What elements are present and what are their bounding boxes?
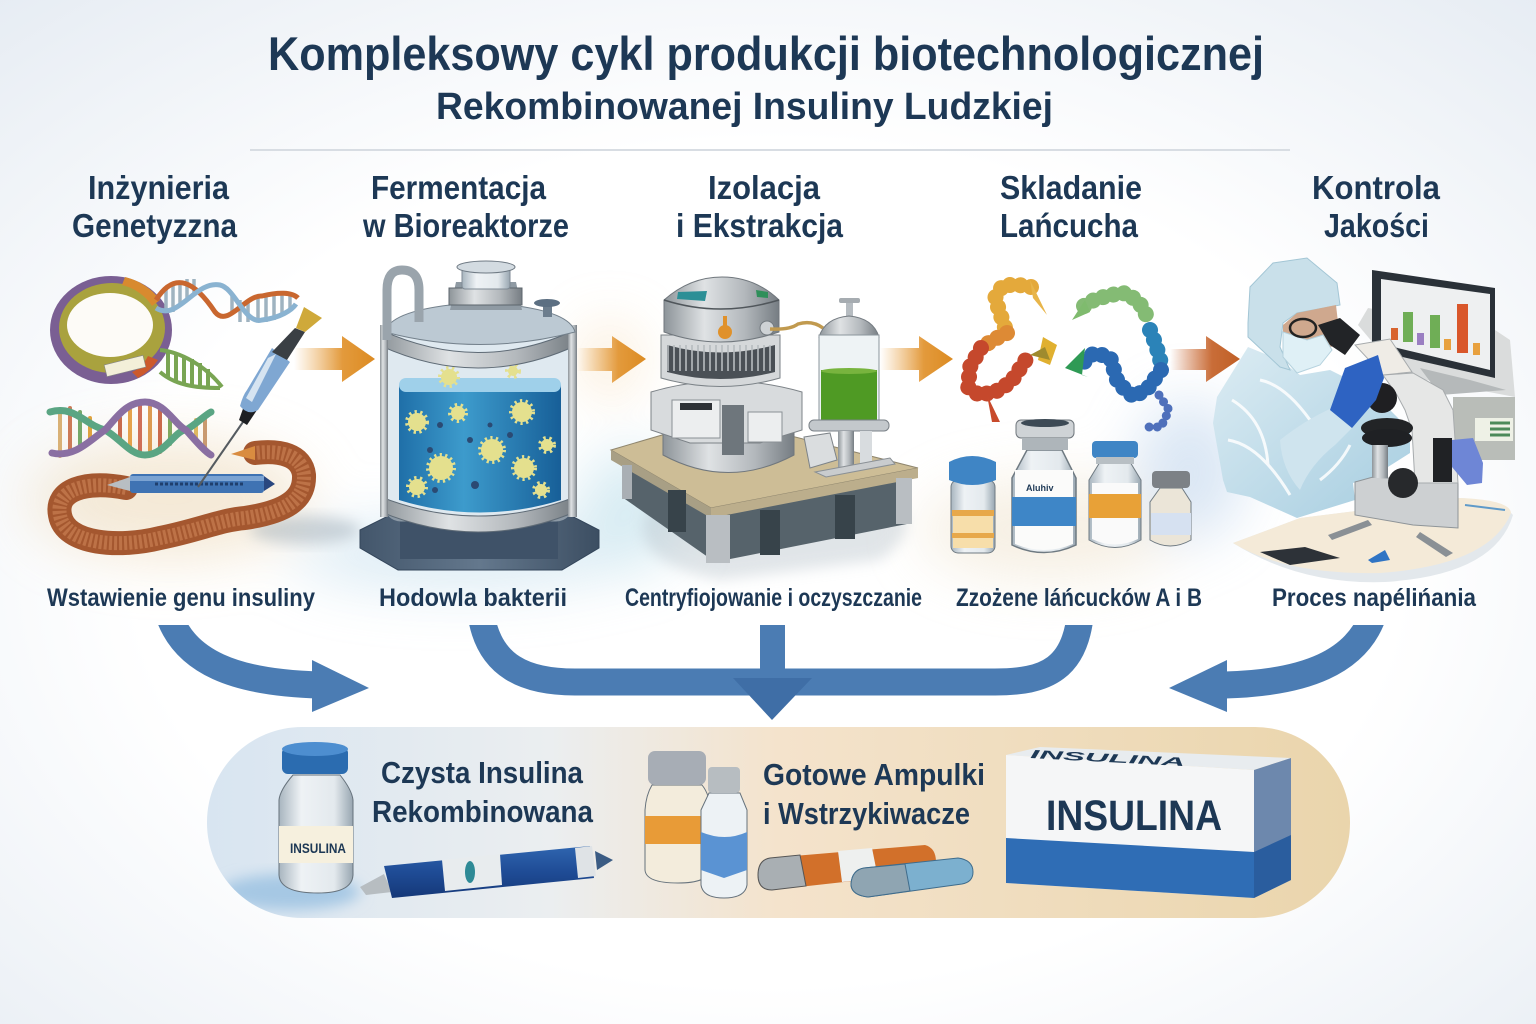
microscope base and arm [1328,339,1458,557]
reactor collar and neck [449,261,522,310]
vial: tall centre [1012,419,1076,552]
heading: step 2: w Bioreaktorze [362,207,569,244]
table disc [1233,498,1513,582]
caption: step 5: Proces napélińania [1272,584,1477,612]
label: pure recombinant insulin [372,755,594,829]
heading: step 5 [1312,169,1441,244]
blue side pouch [1452,438,1483,485]
reactor glass vessel [385,330,572,520]
illustration: quality control scientist [1213,258,1515,582]
arrow: step 1 to 2 [294,336,375,382]
heading: step 4: Skladanie [1000,169,1142,206]
protein chain A [968,285,1031,395]
reactor valve [534,299,560,317]
heading: step 2 [362,169,569,244]
arrow: step 2 to 3 [577,336,646,383]
chain B tail and arrow tip [1065,300,1169,427]
suit sleeve [1280,408,1352,490]
orange cartridge [758,845,936,890]
illustration: bioreactor [360,261,599,570]
vial: small blue cap [949,456,996,553]
monitor with chart [1372,270,1506,395]
heading: step 2: Fermentacja [371,169,547,206]
heading: step 1 [72,169,238,244]
label: pure recombinant insulin: Czysta Insulina [381,755,584,790]
vial: grey cap [1150,471,1191,546]
arrow: step 4 to 5 [1170,336,1240,382]
flow arrow: centre merge [469,625,1092,720]
subtitle: Rekombinowanej Insuliny Ludzkiej [436,86,1053,128]
panel: final products [207,727,1350,918]
label: ready ampoules [763,757,985,831]
reactor base [360,510,599,570]
icon: syringe [198,307,322,487]
label: ready ampoules: Gotowe Ampulki [763,757,985,792]
illustration: protein chains and vials [949,280,1191,553]
flow arrow: right [1169,625,1384,712]
vial: tall centre: Aluhiv [1026,483,1054,493]
product box: INSULINA [1030,747,1185,769]
background colour washes [30,325,1245,590]
chain A end pieces [987,280,1057,422]
vial: pure insulin [279,742,353,893]
caption: step 4: Zzożene láńcucków A i B [956,584,1202,612]
eyepiece [1318,318,1360,355]
arrow: step 3 to 4 [880,336,953,382]
blue cartridge [851,858,973,897]
hood [1248,258,1340,370]
centrifuge body [651,381,802,455]
icon: green DNA fragment [160,350,222,388]
blue glove [1330,355,1384,428]
glass flask with green liquid [804,298,895,477]
reactor dome [385,305,575,344]
icon: brown worm-like gene strand [59,446,360,544]
icon: double helix [50,402,211,456]
icon: plasmid ring [50,276,172,384]
heading: step 5: Kontrola [1312,169,1441,206]
heading: step 5: Jakości [1324,207,1429,244]
flow arrow: left [158,625,369,712]
protein chain B [1084,293,1161,397]
heading: step 3: Izolacja [708,169,821,206]
centrifuge vent band [661,335,780,386]
caption: step 3: Centryfiojowanie i oczyszczanie [625,584,922,612]
product box [1006,747,1291,898]
product box: INSULINA [1046,792,1222,840]
caption: step 2: Hodowla bakterii [379,584,567,612]
face and mask [1283,305,1340,373]
centrifuge lower barrel [663,420,794,472]
bacteria [408,366,553,496]
injector pen [360,846,613,898]
table [611,418,918,580]
heading: step 3: i Ekstrakcja [676,207,844,244]
suit creases [1228,380,1350,495]
icon: upper DNA strand [156,279,298,322]
heading: step 1: Inżynieria [88,169,230,206]
culture liquid [399,378,561,512]
heading: step 1: Genetyzzna [72,207,238,244]
title: Kompleksowy cykl produkcji biotechnologicznej [268,27,1264,80]
label: ready ampoules: i Wstrzykiwacze [763,796,970,831]
heading: step 3 [676,169,844,244]
back instrument panel and case [1358,308,1515,460]
illustration: genetic engineering [50,276,360,544]
tablet and notes on table [1260,505,1505,565]
scientist suit [1213,347,1410,518]
ampoule: blue liquid [701,767,747,898]
caption: step 1: Wstawienie genu insuliny [47,584,315,612]
heading: step 4: Lańcucha [1000,207,1139,244]
vial: pure insulin: INSULINA [290,840,346,856]
heading: step 4 [1000,169,1142,244]
label: pure recombinant insulin: Rekombinowana [372,794,594,829]
centrifuge dome [664,277,779,342]
gold connecting tube [770,323,823,329]
vial: orange label ampoule [645,751,710,883]
vial: orange label [1089,441,1141,548]
illustration: centrifuge and extraction [611,277,918,580]
reactor pipe [387,270,419,340]
reactor rings and rods [380,325,577,532]
icon: blue gene pen [107,474,275,493]
